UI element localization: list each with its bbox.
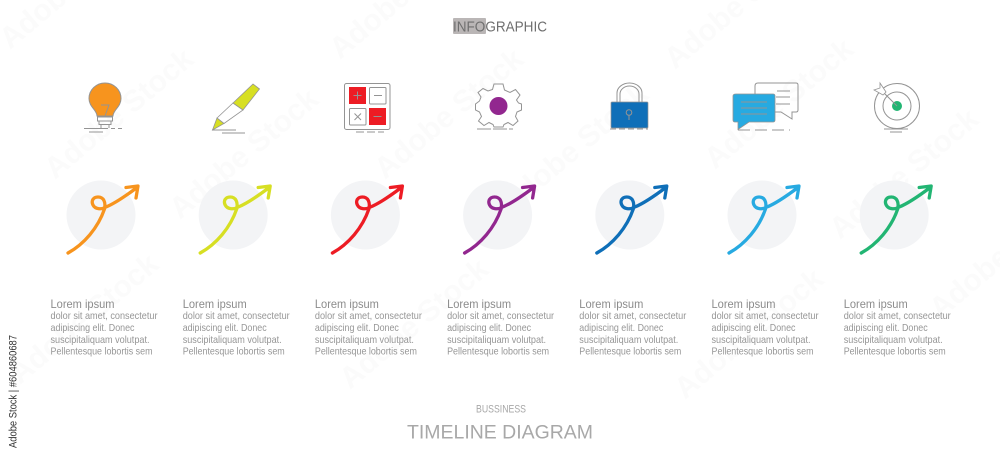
text block 5: dolor sit amet, consectetur (579, 311, 687, 322)
text block 2: suscipitaliquam volutpat. (183, 335, 282, 346)
step 4 arrow (463, 180, 535, 253)
text block 3: Pellentesque lobortis sem (315, 346, 417, 358)
text block 5: Pellentesque lobortis sem (579, 346, 681, 358)
text block 7: suscipitaliquam volutpat. (844, 335, 943, 346)
text block 1: suscipitaliquam volutpat. (50, 335, 150, 346)
step 1 arrow (66, 180, 138, 253)
icon: highlighter pen (212, 84, 260, 133)
text block 3: Lorem ipsum (315, 297, 379, 311)
text block 6: dolor sit amet, consectetur (712, 311, 819, 322)
watermark pattern: Adobe Stock (333, 252, 495, 395)
step 7 arrow (860, 180, 931, 253)
watermark pattern: Adobe Stock (698, 32, 860, 175)
icon: chat bubbles (733, 83, 798, 130)
icon: light bulb (84, 83, 122, 132)
text block 7: Lorem ipsum (844, 297, 908, 311)
watermark pattern: Adobe Stock (368, 42, 530, 185)
text block 3: suscipitaliquam volutpat. (315, 335, 414, 346)
text block 6: adipiscing elit. Donec (712, 323, 796, 334)
text block 1 (50, 297, 158, 358)
text block 6 (712, 297, 819, 358)
text block 4 (447, 297, 555, 358)
icon: gear (476, 84, 522, 129)
icon: calculator (344, 84, 390, 132)
text block 6: Lorem ipsum (712, 297, 776, 311)
watermark pattern: Adobe Stock (823, 102, 985, 245)
heading: timeline diagram: TIMELINE DIAGRAM (407, 422, 593, 444)
text block 4: Lorem ipsum (447, 297, 511, 311)
icon: padlock (610, 83, 648, 129)
text block 2: Pellentesque lobortis sem (183, 346, 285, 358)
text block 4: adipiscing elit. Donec (447, 323, 531, 334)
text block 1: adipiscing elit. Donec (50, 323, 134, 334)
text block 4: Pellentesque lobortis sem (447, 346, 549, 358)
title: infographic: INFOGRAPHIC (453, 18, 547, 36)
text block 5: suscipitaliquam volutpat. (579, 335, 678, 346)
circles and arrows row (66, 180, 931, 253)
text block 2: adipiscing elit. Donec (183, 323, 267, 334)
step 5 arrow (595, 180, 667, 253)
step 3 arrow (331, 180, 402, 253)
text block 3 (315, 297, 422, 358)
text block 6: suscipitaliquam volutpat. (712, 335, 810, 346)
icon: target (874, 83, 920, 132)
text block 4: dolor sit amet, consectetur (447, 311, 555, 322)
step 6 arrow (728, 180, 799, 253)
text block 5: adipiscing elit. Donec (579, 323, 663, 334)
step 2 arrow (199, 180, 270, 253)
text block 2: Lorem ipsum (183, 297, 247, 311)
text block 2 (183, 297, 290, 358)
text block 4: suscipitaliquam volutpat. (447, 335, 546, 346)
text block 7: dolor sit amet, consectetur (844, 311, 951, 322)
text block 7: Pellentesque lobortis sem (844, 346, 946, 358)
text block 3: dolor sit amet, consectetur (315, 311, 422, 322)
text block 1: Lorem ipsum (50, 297, 115, 311)
subtitle: bussiness: BUSSINESS (476, 404, 526, 416)
watermark pattern: Adobe Stock (493, 77, 655, 220)
text block 5: Lorem ipsum (579, 297, 643, 311)
text block 1: Pellentesque lobortis sem (50, 346, 152, 358)
watermark pattern: Adobe Stock (38, 42, 200, 185)
text block 2: dolor sit amet, consectetur (183, 311, 290, 322)
text block 3: adipiscing elit. Donec (315, 323, 399, 334)
text block 6: Pellentesque lobortis sem (712, 346, 814, 358)
side credit: stock id: Adobe Stock | #604860687 (8, 335, 20, 448)
watermark pattern: Adobe Stock (3, 247, 165, 390)
watermark pattern: Adobe Stock (668, 262, 830, 405)
watermark pattern: Adobe Stock (163, 82, 325, 225)
text block 7 (844, 297, 951, 358)
text block 7: adipiscing elit. Donec (844, 323, 928, 334)
text block 5 (579, 297, 687, 358)
text block 1: dolor sit amet, consectetur (50, 311, 158, 322)
